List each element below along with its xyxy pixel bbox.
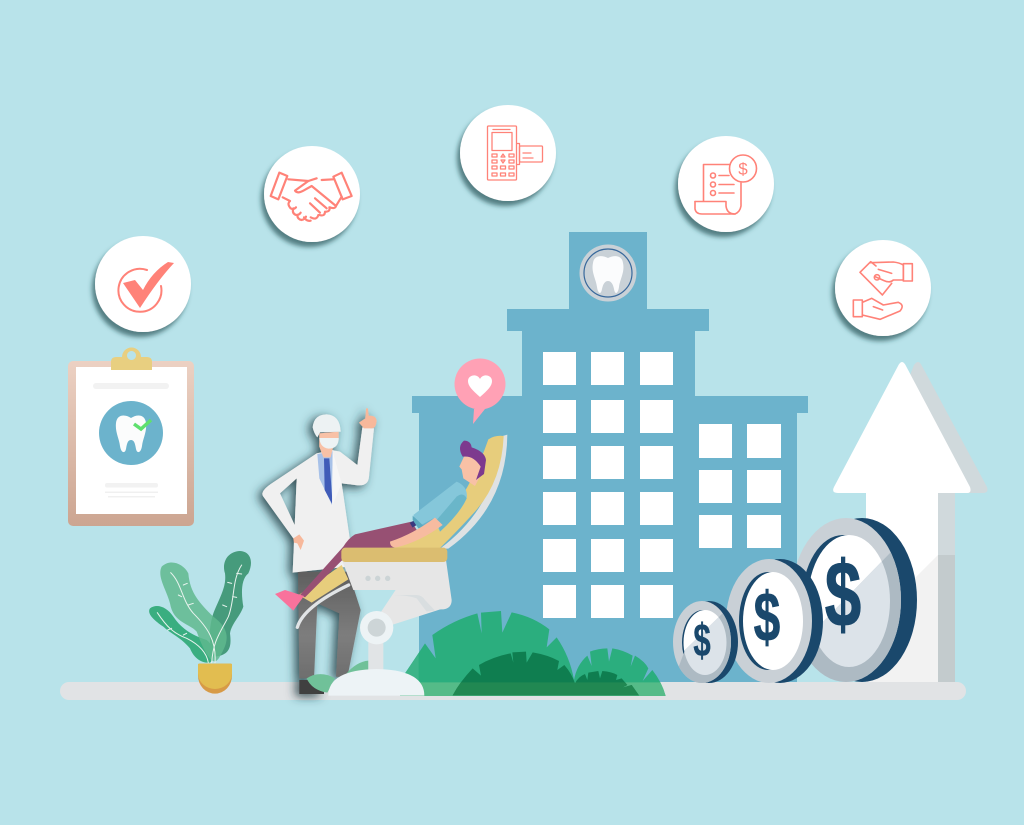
dark bush (453, 652, 639, 695)
base dome (328, 669, 424, 696)
head (319, 432, 339, 457)
tie (324, 458, 333, 505)
patient (275, 441, 486, 611)
floor (60, 682, 966, 700)
trousers (298, 572, 361, 678)
arm (380, 588, 443, 627)
building (412, 232, 808, 685)
seat body (342, 560, 452, 609)
stem (368, 640, 383, 672)
back rest edge (440, 435, 507, 549)
lapel (332, 451, 342, 507)
small coin (673, 601, 738, 683)
icon circle: handshake (264, 146, 360, 242)
icon circle: money in hand (835, 240, 931, 336)
clock with tooth (580, 244, 636, 302)
dental chair (275, 435, 507, 696)
shirt (317, 451, 333, 505)
icon circle: invoice: $ (738, 160, 748, 178)
tooth badge (99, 401, 163, 465)
clipboard (68, 348, 194, 526)
coins (670, 518, 917, 690)
pivot (360, 611, 393, 644)
pink shoe (275, 590, 304, 611)
plant (149, 551, 251, 694)
sleeve cuff (413, 516, 424, 528)
arm (390, 518, 443, 547)
dentist (262, 408, 377, 694)
arrow up (833, 362, 988, 685)
large coin: $ (825, 542, 861, 646)
medium coin (726, 559, 823, 683)
building windows (543, 352, 781, 618)
icon circle: card terminal (460, 105, 556, 201)
large coin (796, 518, 917, 682)
trousers (300, 522, 418, 597)
lower hand (293, 534, 304, 550)
shoe (299, 680, 324, 694)
icon circle: check mark (95, 236, 191, 332)
lab coat (262, 427, 374, 573)
leg rest (299, 565, 348, 603)
raised hand (359, 408, 377, 428)
clip (111, 348, 152, 370)
neck and face (459, 457, 482, 486)
hair (460, 441, 486, 480)
medium coin: $ (754, 578, 780, 656)
large bush (400, 611, 666, 696)
bushes (400, 611, 666, 696)
icon circle: invoice (678, 136, 774, 232)
seat cushion (341, 548, 447, 562)
shirt (413, 482, 467, 532)
speech bubble with heart (454, 358, 506, 424)
back rest (390, 436, 504, 548)
small leaves by feet (307, 661, 368, 693)
small coin: $ (693, 615, 711, 667)
